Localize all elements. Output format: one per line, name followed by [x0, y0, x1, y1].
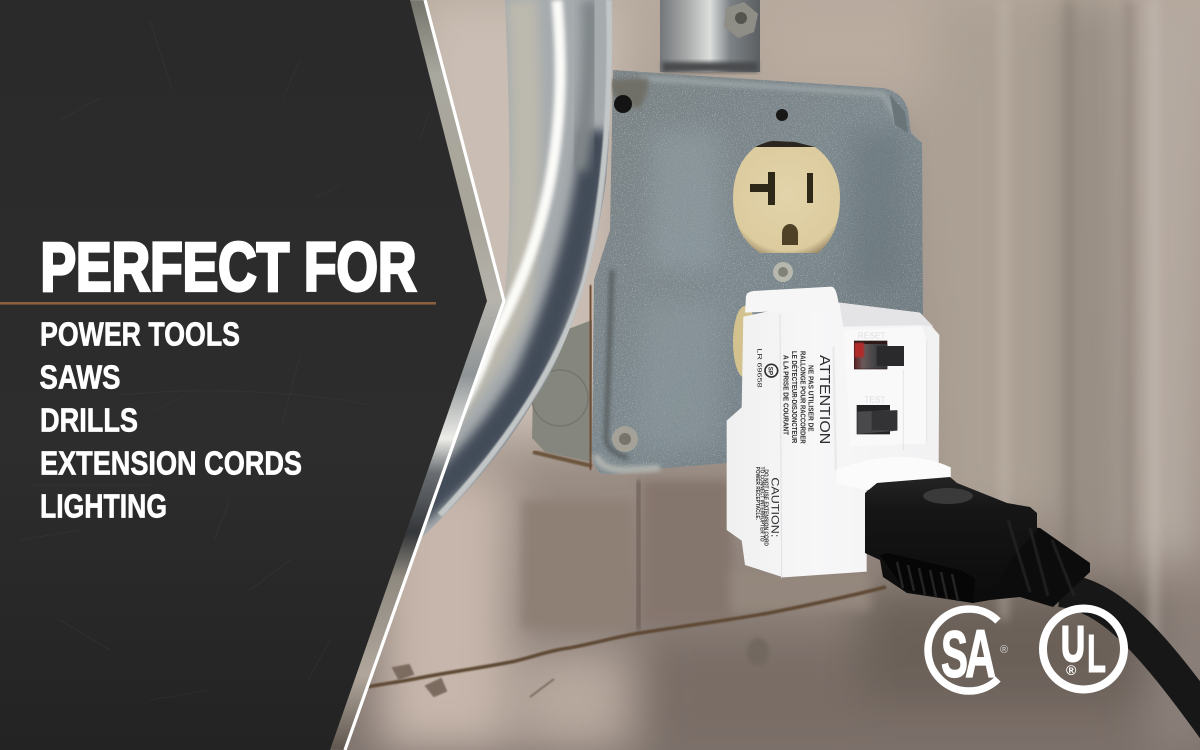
UL certification logo: U	[1061, 616, 1085, 672]
photo background: electrical outlet on wall	[330, 0, 1200, 750]
translucent band beside panel	[325, 0, 505, 750]
CSA certification logo: ®	[1000, 644, 1008, 656]
white chevron outline	[345, 0, 504, 750]
attention label	[755, 348, 832, 444]
caution label: DO NOT USE EXTENSION CORD	[763, 469, 769, 546]
receptacle slots	[750, 172, 813, 245]
GFCI adapter device	[727, 287, 951, 578]
list of uses: LIGHTING	[40, 488, 167, 526]
heading: perfect for: PERFECT FOR	[40, 228, 416, 306]
list of uses: SAWS	[40, 360, 120, 396]
attention label: A LA PRISE DE COURANT	[781, 355, 790, 435]
caution label: POWER RECEPTACLE.	[754, 467, 760, 520]
caution label	[756, 466, 779, 546]
list of uses: DRILLS	[40, 402, 138, 440]
UL certification logo: L	[1087, 624, 1106, 684]
UL certification logo: ®	[1066, 662, 1077, 678]
copper divider rule	[0, 302, 436, 305]
wall	[330, 0, 1200, 750]
attention label: NE PAS UTILISER DE	[807, 365, 816, 432]
dark chevron panel	[0, 0, 487, 750]
list of uses: POWER TOOLS	[40, 316, 240, 354]
top tab	[745, 287, 839, 313]
wall receptacle	[733, 141, 840, 378]
device body	[727, 303, 951, 577]
list of uses	[40, 316, 302, 526]
test button: TEST	[864, 395, 886, 405]
reset button	[854, 330, 904, 369]
attention label: ATTENTION	[816, 355, 832, 444]
panel scratch texture	[20, 20, 430, 700]
CSA certification logo	[928, 609, 1008, 692]
left knockout box	[532, 285, 592, 470]
metal conduit elbow	[422, 0, 612, 537]
reset button: RESET	[858, 330, 886, 340]
caution label: CAUTION:	[768, 477, 780, 537]
list of uses: EXTENSION CORDS	[40, 446, 302, 482]
top vertical conduit	[660, 0, 760, 72]
UL certification logo	[1043, 608, 1124, 690]
attention label: SP	[767, 367, 774, 375]
CSA certification logo: A	[965, 616, 996, 692]
test button	[857, 395, 897, 434]
attention label: LR 69658	[755, 348, 762, 388]
box holes and screws	[612, 95, 908, 452]
power cord cable	[1060, 590, 1200, 730]
CSA certification logo: S	[941, 617, 968, 691]
button recess	[843, 327, 927, 447]
caution label: TO CONNECT INTERRUPTER TO	[758, 467, 764, 542]
attention label: LE DÉTECTEUR-DISJONCTEUR	[790, 351, 799, 444]
attention label: RALLONGE POUR RACCORDER	[798, 351, 807, 444]
metal junction box	[592, 70, 923, 474]
black plug	[865, 477, 1090, 607]
